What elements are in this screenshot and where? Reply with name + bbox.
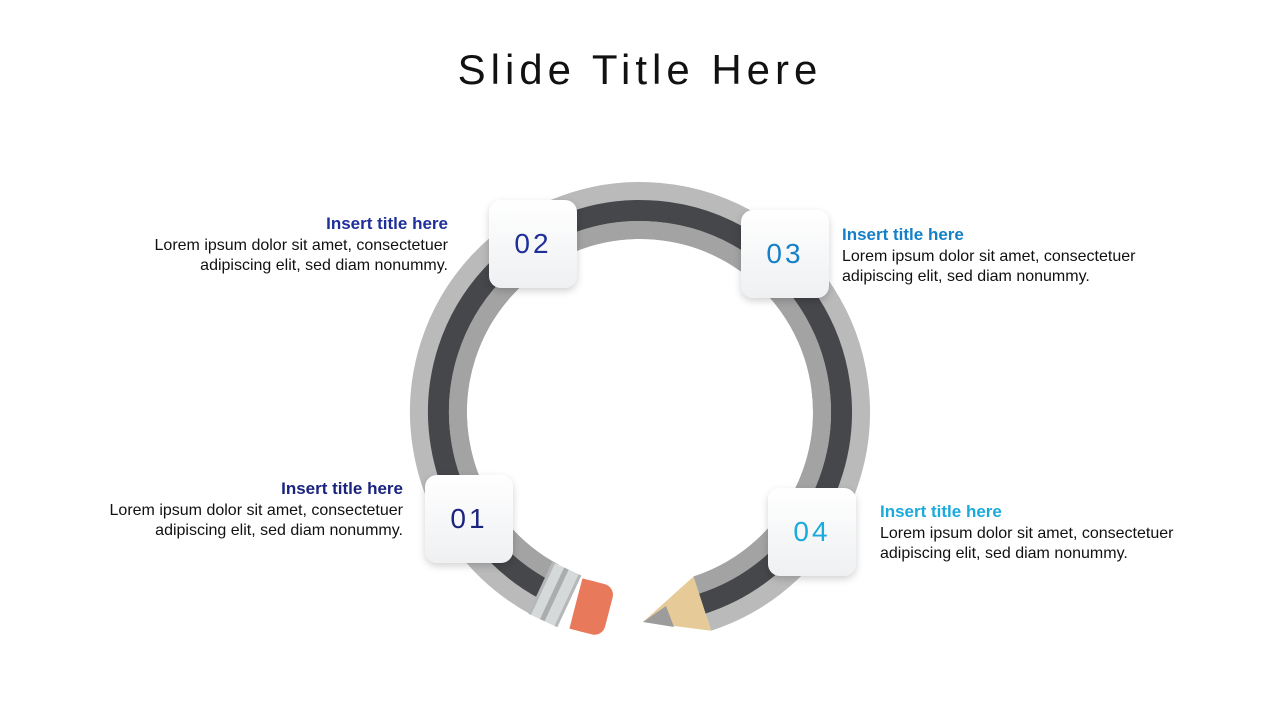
- box 01: 01: [450, 503, 488, 534]
- box 04: 04: [793, 516, 831, 547]
- text 03: Insert title here: [842, 225, 964, 244]
- box 01: [425, 475, 513, 563]
- text 04: Lorem ipsum dolor sit amet, consectetuer: [880, 525, 1173, 542]
- text 01: Lorem ipsum dolor sit amet, consectetuer: [110, 502, 403, 519]
- text 02: [155, 214, 448, 274]
- wood tip: [643, 576, 711, 631]
- text 01: Insert title here: [281, 479, 403, 498]
- box 03: [741, 210, 829, 298]
- text 01: [110, 479, 403, 538]
- text 04: Insert title here: [880, 502, 1002, 521]
- ferrule: [528, 562, 581, 627]
- box 02: 02: [514, 228, 552, 259]
- box 03: 03: [766, 238, 804, 269]
- text 03: [842, 225, 1136, 284]
- text 02: Insert title here: [326, 214, 448, 233]
- box 04: [768, 488, 856, 576]
- text 04: [880, 502, 1174, 562]
- box 02: [489, 200, 577, 288]
- text 02: adipiscing elit, sed diam nonummy.: [200, 256, 448, 274]
- text 02: Lorem ipsum dolor sit amet, consectetuer: [155, 237, 448, 254]
- text 04: adipiscing elit, sed diam nonummy.: [880, 544, 1128, 562]
- pencil body arc: [438, 210, 841, 604]
- text 03: adipiscing elit, sed diam nonummy.: [842, 268, 1090, 284]
- title: Slide Title Here: [458, 46, 822, 93]
- text 01: adipiscing elit, sed diam nonummy.: [155, 522, 403, 538]
- text 03: Lorem ipsum dolor sit amet, consectetuer: [842, 248, 1135, 265]
- eraser: [569, 578, 615, 637]
